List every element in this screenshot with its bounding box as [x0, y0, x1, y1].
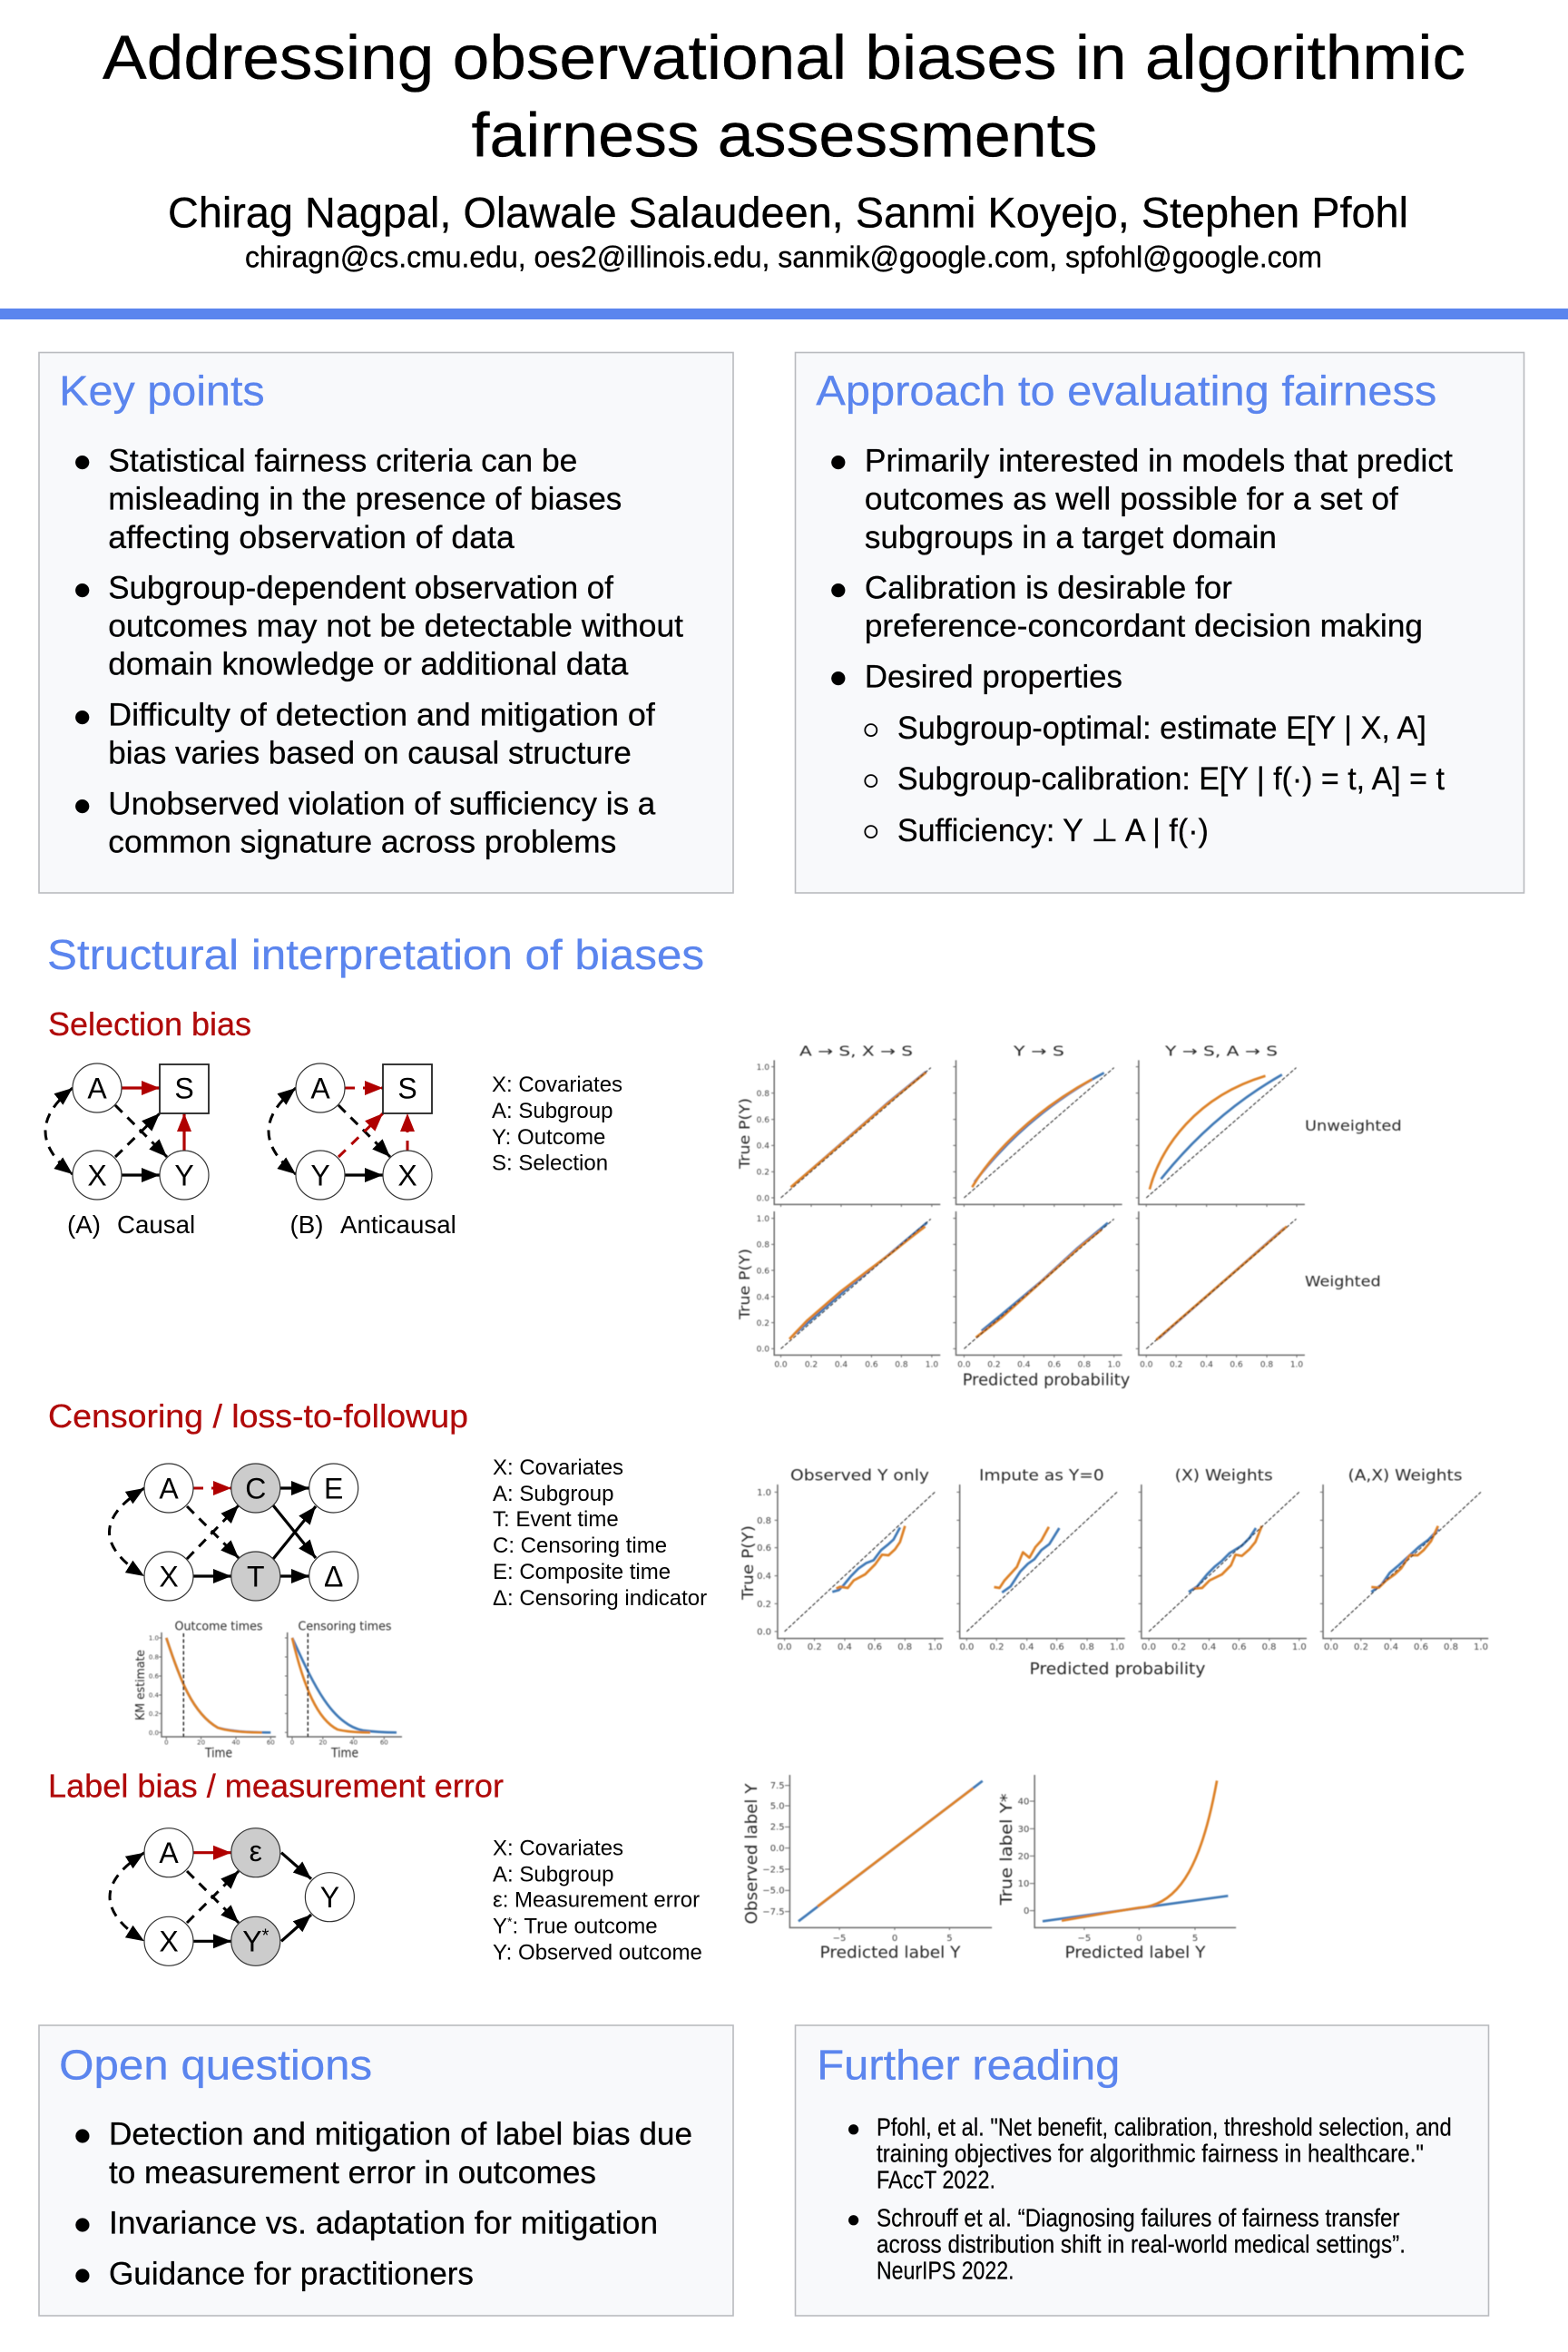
heading: further reading: Further reading — [817, 2042, 1120, 2089]
bullet list: approach: Calibration is desirable for — [865, 571, 1232, 606]
legend: label bias: * — [507, 1915, 513, 1929]
reference list — [848, 2112, 1452, 2285]
KM axes and curves — [159, 1632, 402, 1740]
legend: label bias: : True outcome — [512, 1915, 658, 1939]
bullet list: approach: Desired properties — [865, 660, 1122, 695]
panel: key points — [39, 352, 733, 893]
KM labels: Censoring times — [298, 1621, 392, 1634]
KM tick labels: 0 — [290, 1740, 294, 1747]
KM tick labels: 20 — [318, 1740, 327, 1747]
diagram: selection bias causal — [45, 1063, 209, 1239]
censoring column titles: Impute as Y=0 — [979, 1467, 1104, 1485]
KM tick labels: 0.2 — [149, 1710, 159, 1718]
tick labels: selection: 0.4 — [757, 1142, 769, 1152]
censoring tick labels: 0.2 — [1354, 1642, 1368, 1652]
label bias tick labels: 5.0 — [770, 1801, 785, 1811]
chart: label bias observed and true — [742, 1775, 1236, 1962]
censoring tick labels: 0.6 — [1050, 1642, 1064, 1652]
label bias tick labels: 40 — [1018, 1797, 1029, 1808]
diagram: label bias: ε — [250, 1835, 262, 1867]
bullet list: approach: Sufficiency: Y ⊥ A | f(·) — [897, 813, 1209, 848]
diagram: selection bias causal: Causal — [117, 1210, 195, 1239]
KM tick labels: 20 — [197, 1740, 205, 1747]
authors: Chirag Nagpal, Olawale Salaudeen, Sanmi Koyejo, Stephen Pfohl — [168, 189, 1408, 237]
bullet list: approach: subgroups in a target domain — [865, 520, 1277, 555]
chart: selection bias calibration grid — [736, 1043, 1402, 1390]
tick labels: selection: 1.0 — [1290, 1361, 1303, 1370]
tick labels: selection: 0.4 — [835, 1361, 848, 1370]
legend: label bias — [493, 1836, 702, 1965]
bullet list: open questions — [75, 2117, 692, 2292]
tick labels: selection: 0.2 — [805, 1361, 818, 1370]
heading: censoring: Censoring / loss-to-followup — [48, 1397, 468, 1435]
censoring tick labels: 0.8 — [757, 1516, 771, 1526]
axis labels: selection — [736, 1098, 1131, 1390]
censoring tick labels: 0.2 — [757, 1600, 771, 1610]
censoring tick labels: 0.0 — [959, 1642, 974, 1652]
label bias tick labels: 5 — [1192, 1934, 1198, 1944]
label bias tick labels: 0.0 — [770, 1844, 785, 1854]
tick labels: selection: 0.0 — [757, 1194, 769, 1203]
label bias tick labels — [762, 1781, 1198, 1944]
bullet list: open questions: Invariance vs. adaptation for mitigation — [109, 2206, 658, 2241]
diagram: censoring: E — [324, 1472, 343, 1504]
diagram: censoring: A — [159, 1472, 179, 1504]
censoring tick labels: 0.2 — [808, 1642, 822, 1652]
diagram: selection bias causal: A — [87, 1073, 107, 1105]
censoring tick labels: 0.4 — [838, 1642, 852, 1652]
censoring tick labels: 1.0 — [927, 1642, 942, 1652]
diagram: selection bias anticausal: Y — [310, 1160, 330, 1192]
tick labels: selection: 0.2 — [987, 1361, 1001, 1370]
tick labels: selection: 0.4 — [1200, 1361, 1213, 1370]
label bias tick labels: 0 — [1024, 1906, 1029, 1916]
legend: censoring — [493, 1455, 707, 1611]
heading: approach: Approach to evaluating fairness — [816, 367, 1436, 414]
KM tick labels: 0 — [164, 1740, 169, 1747]
diagram: selection bias anticausal: A — [310, 1073, 330, 1105]
censoring tick labels: 0.6 — [757, 1544, 771, 1553]
heading: selection bias: Selection bias — [48, 1005, 251, 1043]
censoring tick labels: 0.6 — [1232, 1642, 1246, 1652]
label bias axes and curves — [785, 1775, 1236, 1930]
label bias tick labels: 0 — [892, 1934, 897, 1944]
label bias tick labels: 20 — [1018, 1852, 1029, 1862]
censoring axes and curves — [775, 1485, 1488, 1641]
legend: label bias: ε: Measurement error — [493, 1888, 700, 1913]
tick labels: selection: 1.0 — [926, 1361, 938, 1370]
panel: approach to evaluating fairness — [795, 352, 1524, 893]
KM tick labels: 0.0 — [149, 1730, 159, 1737]
KM tick labels — [149, 1635, 388, 1747]
label bias tick labels: 2.5 — [770, 1823, 785, 1833]
tick labels: selection: 0.6 — [1230, 1361, 1243, 1370]
diagram: label bias: Y — [242, 1926, 262, 1958]
tick labels: selection: 0.2 — [1170, 1361, 1182, 1370]
bullet list: approach: Subgroup-calibration: E[Y | f(·) = t, A] = t — [897, 761, 1445, 797]
censoring tick labels: 0.8 — [1080, 1642, 1094, 1652]
label bias tick labels: 5 — [946, 1934, 953, 1944]
row labels: selection: Unweighted — [1305, 1117, 1402, 1134]
legend: selection bias: A: Subgroup — [492, 1099, 612, 1123]
label bias tick labels: −5 — [1078, 1934, 1091, 1944]
column titles: selection — [799, 1043, 1278, 1059]
tick labels: selection: 0.8 — [757, 1090, 769, 1099]
bullet list: open questions: Detection and mitigation of label bias due — [109, 2117, 692, 2152]
legend: label bias: Y: Observed outcome — [493, 1940, 702, 1965]
censoring tick labels: 0.0 — [1324, 1642, 1338, 1652]
censoring tick labels: 0.6 — [1414, 1642, 1428, 1652]
KM labels: Outcome times — [174, 1621, 263, 1634]
censoring tick labels: 1.0 — [1292, 1642, 1307, 1652]
tick labels: selection: 0.2 — [757, 1169, 769, 1178]
author emails: chiragn@cs.cmu.edu, oes2@illinois.edu, sanmik@google.com, spfohl@google.com — [245, 240, 1322, 274]
axis labels: selection: True P(Y) — [736, 1098, 753, 1170]
censoring tick labels: 0.2 — [1171, 1642, 1186, 1652]
label bias axis labels: Observed label Y — [742, 1782, 761, 1924]
bullet list: open questions: Guidance for practitioners — [109, 2257, 474, 2292]
legend: censoring: C: Censoring time — [493, 1534, 667, 1558]
reference list: Schrouff et al. “Diagnosing failures of fairness transfer — [877, 2203, 1399, 2231]
diagram: censoring: Δ — [324, 1561, 343, 1593]
label bias tick labels: 7.5 — [770, 1781, 785, 1791]
censoring tick labels: 0.4 — [1201, 1642, 1216, 1652]
KM labels: Time — [204, 1747, 232, 1761]
legend: selection bias: S: Selection — [492, 1151, 608, 1176]
section heading: structural interpretation: Structural interpretation of biases — [47, 931, 704, 978]
diagram: censoring: C — [245, 1472, 266, 1504]
censoring column titles — [790, 1467, 1463, 1485]
censoring tick labels: 0.0 — [778, 1642, 792, 1652]
censoring tick labels: 0.0 — [757, 1628, 771, 1637]
bullet list: approach — [831, 444, 1453, 848]
legend: censoring: X: Covariates — [493, 1455, 623, 1480]
reference list: across distribution shift in real-world medical settings”. — [877, 2230, 1406, 2258]
bullet list: approach: Primarily interested in models that predict — [865, 444, 1453, 479]
label bias tick labels: −2.5 — [762, 1865, 785, 1875]
KM tick labels: 0.6 — [149, 1673, 160, 1681]
KM tick labels: 40 — [349, 1740, 358, 1747]
legend: censoring: Δ: Censoring indicator — [493, 1586, 707, 1611]
censoring tick labels: 0.4 — [1020, 1642, 1034, 1652]
bullet list: key points: domain knowledge or additional data — [108, 647, 629, 682]
censoring tick labels: 0.4 — [757, 1572, 771, 1582]
KM labels — [134, 1621, 392, 1761]
bullet list: key points: common signature across problems — [108, 825, 616, 860]
KM tick labels: 60 — [380, 1740, 388, 1747]
diagram: selection bias causal: X — [87, 1160, 107, 1192]
censoring tick labels: 0.0 — [1142, 1642, 1156, 1652]
label bias axis labels — [742, 1782, 1207, 1962]
row labels: selection: Weighted — [1305, 1273, 1381, 1290]
chart axes and curves: selection — [771, 1060, 1305, 1357]
legend: selection bias: Y: Outcome — [492, 1125, 605, 1150]
diagram: selection bias anticausal: X — [397, 1160, 417, 1192]
tick labels: selection: 0.8 — [757, 1241, 769, 1250]
tick labels: selection: 0.4 — [757, 1293, 769, 1302]
tick labels: selection — [757, 1063, 1303, 1370]
censoring column titles: (X) Weights — [1175, 1467, 1273, 1485]
censoring tick labels: 1.0 — [1474, 1642, 1488, 1652]
heading: key points: Key points — [59, 367, 265, 414]
bullet list: open questions: to measurement error in outcomes — [109, 2155, 596, 2190]
KM labels: KM estimate — [134, 1650, 148, 1720]
censoring tick labels — [757, 1488, 1488, 1652]
reference list: FAccT 2022. — [877, 2165, 995, 2193]
diagram: censoring: T — [247, 1561, 265, 1593]
legend: censoring: A: Subgroup — [493, 1482, 613, 1506]
label bias tick labels: −5.0 — [762, 1886, 785, 1896]
diagram: selection bias causal: S — [174, 1073, 194, 1105]
diagram: censoring: X — [159, 1561, 179, 1593]
censoring tick labels: 0.8 — [1444, 1642, 1458, 1652]
label bias tick labels: −5 — [833, 1934, 846, 1944]
tick labels: selection: 0.6 — [757, 1267, 769, 1276]
bullet list: key points: bias varies based on causal structure — [108, 736, 632, 771]
diagram: label bias — [110, 1828, 354, 1965]
censoring axis labels: Predicted probability — [1029, 1660, 1206, 1679]
diagram: label bias: X — [159, 1926, 179, 1958]
bullet list: key points: outcomes may not be detectable without — [108, 609, 683, 644]
legend: selection bias: X: Covariates — [492, 1073, 622, 1097]
header rule — [0, 309, 1568, 319]
panel: further reading — [795, 2025, 1488, 2316]
label bias tick labels: 10 — [1018, 1879, 1029, 1889]
diagram: selection bias anticausal: (B) — [290, 1210, 323, 1239]
legend: censoring: T: Event time — [493, 1507, 619, 1532]
KM labels: Time — [330, 1747, 358, 1761]
label bias tick labels: 0 — [1136, 1934, 1142, 1944]
diagram: label bias: A — [159, 1837, 179, 1869]
tick labels: selection: 0.4 — [1017, 1361, 1031, 1370]
bullet list: approach: Subgroup-optimal: estimate E[Y | X, A] — [897, 710, 1426, 746]
tick labels: selection: 1.0 — [1108, 1361, 1121, 1370]
censoring column titles: Observed Y only — [790, 1467, 929, 1485]
censoring tick labels: 1.0 — [1110, 1642, 1124, 1652]
tick labels: selection: 0.0 — [774, 1361, 788, 1370]
diagram: selection bias anticausal: S — [397, 1073, 417, 1105]
censoring tick labels: 0.8 — [897, 1642, 912, 1652]
tick labels: selection: 0.6 — [1048, 1361, 1061, 1370]
label bias axis labels: Predicted label Y — [820, 1943, 962, 1962]
censoring axis labels — [740, 1525, 1206, 1679]
KM tick labels: 60 — [267, 1740, 275, 1747]
title: Addressing observational biases in algorithmic — [103, 23, 1465, 93]
column titles: selection: Y → S, A → S — [1164, 1043, 1278, 1059]
chart: censoring calibration row — [740, 1467, 1488, 1679]
heading: open questions: Open questions — [59, 2042, 372, 2089]
bullet list: key points: Statistical fairness criteria can be — [108, 444, 577, 479]
axis labels: selection: Predicted probability — [963, 1371, 1131, 1390]
row labels: selection — [1305, 1117, 1402, 1290]
diagram: selection bias causal: Y — [174, 1160, 194, 1192]
diagram: label bias: * — [262, 1926, 270, 1945]
tick labels: selection: 0.0 — [757, 1346, 769, 1355]
heading: label bias: Label bias / measurement error — [48, 1768, 504, 1805]
legend: selection bias — [492, 1073, 622, 1176]
bullet list: key points: Unobserved violation of sufficiency is a — [108, 787, 656, 822]
tick labels: selection: 0.8 — [1078, 1361, 1091, 1370]
reference list: Pfohl, et al. "Net benefit, calibration, threshold selection, and — [877, 2112, 1452, 2141]
bullet list: key points: misleading in the presence of biases — [108, 482, 622, 517]
censoring tick labels: 1.0 — [757, 1488, 771, 1498]
diagram: selection bias anticausal: Anticausal — [340, 1210, 456, 1239]
bullet list: approach: outcomes as well possible for a set of — [865, 482, 1398, 517]
bullet list: key points: affecting observation of data — [108, 520, 514, 555]
label bias axis labels: True label Y* — [997, 1793, 1016, 1906]
legend: label bias: X: Covariates — [493, 1836, 623, 1860]
title — [103, 23, 1465, 171]
panel: open questions — [39, 2025, 733, 2316]
censoring axis labels: True P(Y) — [740, 1525, 758, 1601]
tick labels: selection: 0.6 — [757, 1116, 769, 1125]
tick labels: selection: 0.0 — [1140, 1361, 1153, 1370]
legend: label bias: A: Subgroup — [493, 1862, 613, 1886]
censoring tick labels: 0.8 — [1262, 1642, 1277, 1652]
legend: label bias: Y — [493, 1915, 507, 1939]
KM tick labels: 0.8 — [149, 1653, 159, 1661]
KM tick labels: 1.0 — [149, 1635, 159, 1642]
censoring tick labels: 0.6 — [867, 1642, 882, 1652]
tick labels: selection: 0.2 — [757, 1319, 769, 1328]
chart: KM outcome and censoring times — [134, 1621, 402, 1761]
diagram: censoring — [109, 1464, 358, 1601]
label bias axis labels: Predicted label Y — [1065, 1943, 1207, 1962]
KM tick labels: 0.4 — [149, 1691, 160, 1699]
tick labels: selection: 0.6 — [865, 1361, 878, 1370]
diagram: selection bias causal: (A) — [67, 1210, 101, 1239]
diagram: selection bias anticausal — [269, 1063, 456, 1239]
title: fairness assessments — [472, 101, 1098, 171]
column titles: selection: Y → S — [1013, 1043, 1064, 1059]
axis labels: selection: True P(Y) — [736, 1249, 753, 1320]
reference list: NeurIPS 2022. — [877, 2256, 1014, 2284]
KM tick labels: 40 — [232, 1740, 240, 1747]
censoring tick labels: 0.2 — [990, 1642, 1004, 1652]
tick labels: selection: 0.8 — [1260, 1361, 1273, 1370]
label bias tick labels: −7.5 — [762, 1907, 785, 1917]
legend: censoring: E: Composite time — [493, 1560, 671, 1584]
diagram: label bias: Y — [320, 1881, 339, 1914]
bullet list: key points — [75, 444, 683, 860]
tick labels: selection: 1.0 — [757, 1215, 769, 1224]
censoring tick labels: 0.4 — [1384, 1642, 1398, 1652]
censoring column titles: (A,X) Weights — [1348, 1467, 1463, 1485]
label bias tick labels: 30 — [1018, 1825, 1029, 1835]
bullet list: approach: preference-concordant decision making — [865, 609, 1423, 644]
tick labels: selection: 0.8 — [895, 1361, 908, 1370]
tick labels: selection: 1.0 — [757, 1063, 769, 1073]
column titles: selection: A → S, X → S — [799, 1043, 913, 1059]
reference list: training objectives for algorithmic fairness in healthcare." — [877, 2139, 1424, 2167]
tick labels: selection: 0.0 — [957, 1361, 971, 1370]
bullet list: key points: Difficulty of detection and mitigation of — [108, 698, 655, 733]
bullet list: key points: Subgroup-dependent observation of — [108, 571, 613, 606]
